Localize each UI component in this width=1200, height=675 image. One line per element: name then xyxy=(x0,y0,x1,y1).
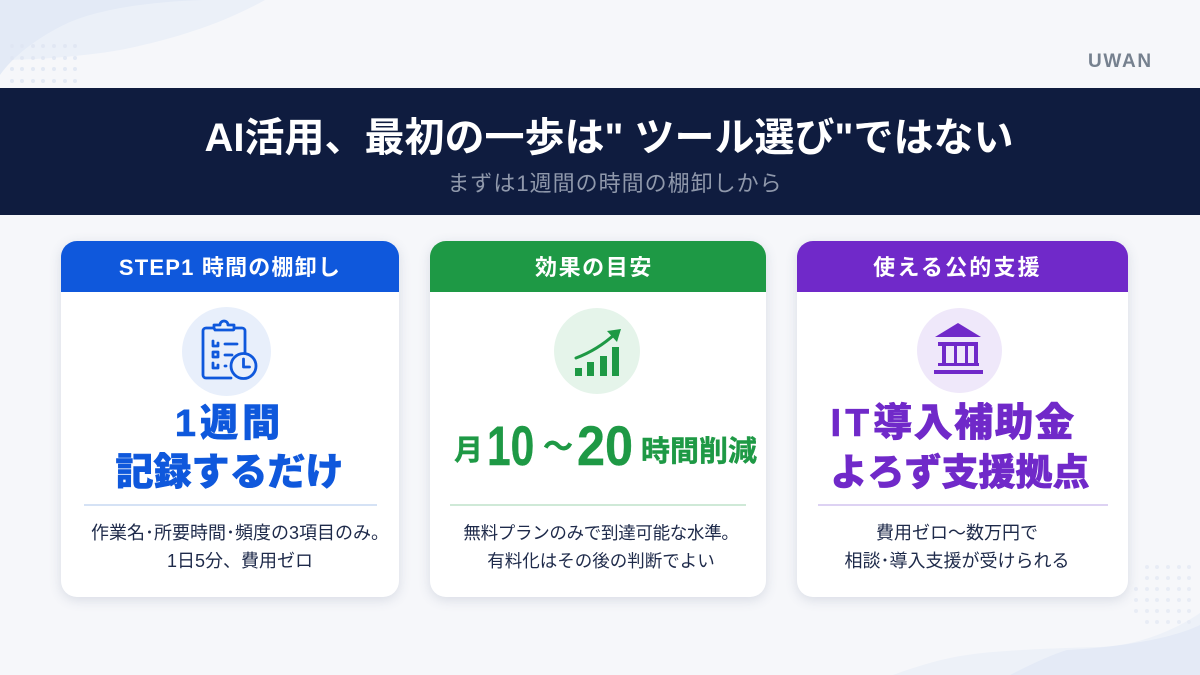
description xyxy=(844,523,1070,571)
main title: AI活用、最初の一歩は" ツール選び"ではない xyxy=(204,116,1014,160)
headline: 20 xyxy=(577,414,633,477)
subtitle: まずは1週間の時間の棚卸しから xyxy=(447,171,783,196)
headline: 記録するだけ xyxy=(115,452,344,494)
panel: effect xyxy=(430,241,766,597)
panel header: 使える公的支援 xyxy=(873,255,1042,280)
description: 費用ゼロ～数万円で xyxy=(876,523,1038,543)
headline xyxy=(454,414,757,477)
headline: 10 xyxy=(487,414,534,477)
panel header xyxy=(430,241,766,292)
headline: ～ xyxy=(543,431,573,464)
headline line 2: よろず支援拠点 xyxy=(830,452,1090,493)
panel: public support xyxy=(797,241,1128,597)
panel header xyxy=(61,241,399,292)
icon: institution building xyxy=(917,308,1002,393)
headline: 時間削減 xyxy=(641,436,757,468)
headline: 1週間 xyxy=(175,403,284,445)
headline: 月 xyxy=(454,435,483,467)
description xyxy=(91,523,389,571)
description: 相談･導入支援が受けられる xyxy=(844,551,1070,571)
panel header xyxy=(797,241,1128,292)
brand logo text: UWAN xyxy=(1088,51,1153,72)
headline: IT導入補助金 xyxy=(830,402,1076,445)
panel: step 1 xyxy=(61,241,399,597)
icon: clipboard with clock xyxy=(182,307,271,396)
description: 1日5分、費用ゼロ xyxy=(167,551,313,571)
panel header: STEP1 時間の棚卸し xyxy=(119,255,341,280)
description: 作業名･所要時間･頻度の3項目のみ。 xyxy=(91,523,389,543)
panel header: 効果の目安 xyxy=(535,255,653,280)
description: 無料プランのみで到達可能な水準。 xyxy=(463,523,739,543)
description xyxy=(463,523,739,571)
title banner xyxy=(0,88,1200,215)
description: 有料化はその後の判断でよい xyxy=(487,551,715,571)
headline xyxy=(115,403,344,494)
icon: growth chart xyxy=(554,308,640,394)
